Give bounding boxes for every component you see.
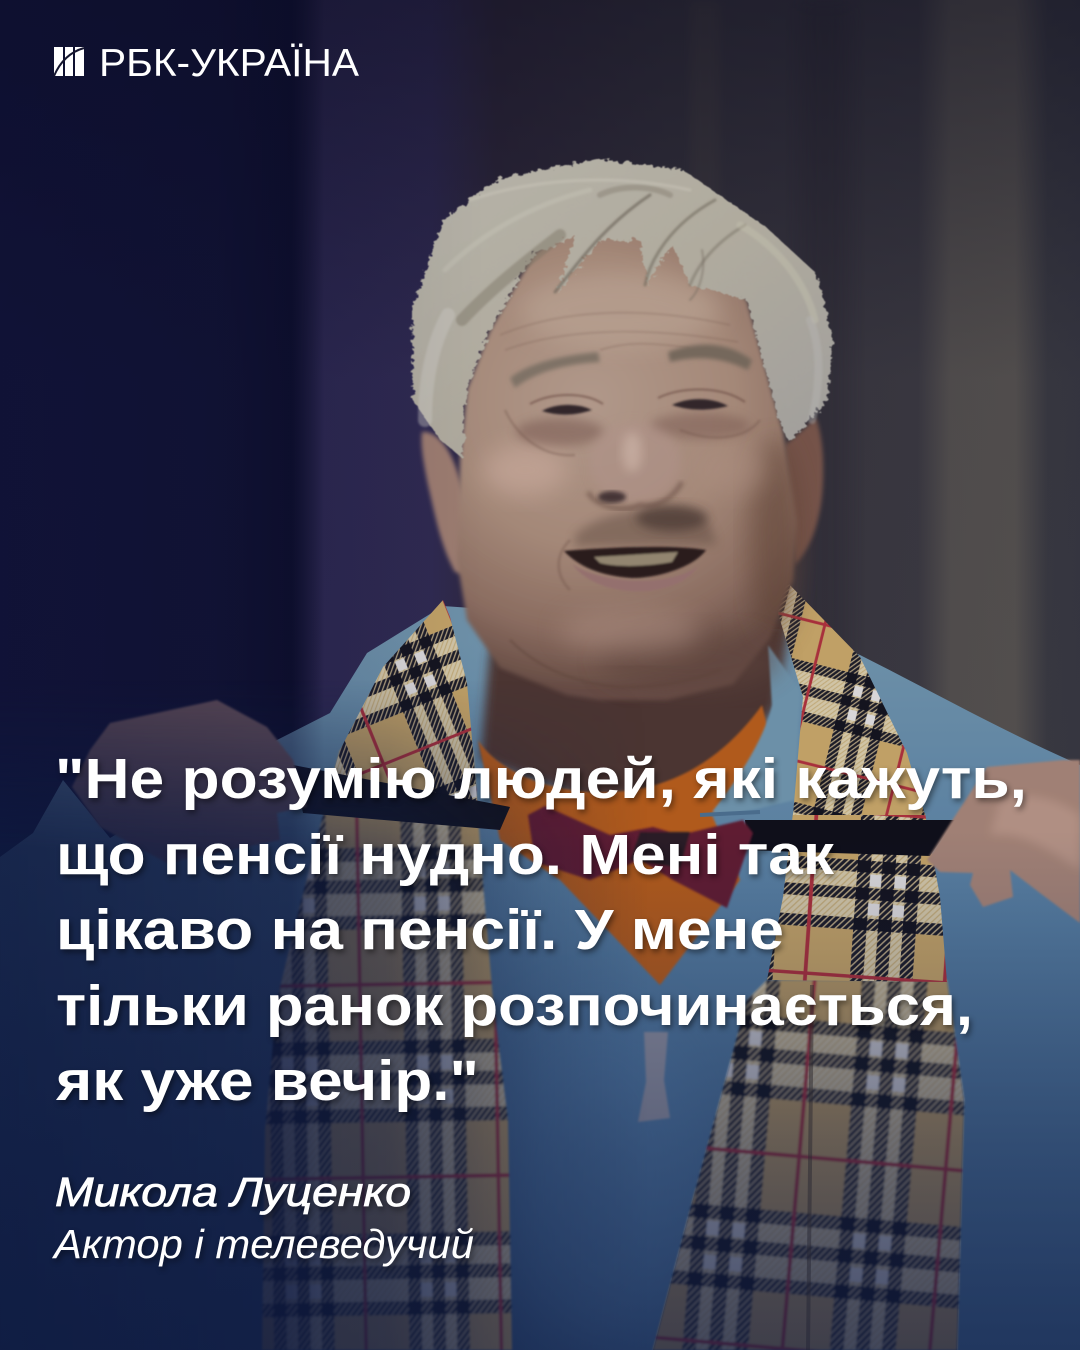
speaker name: Микола Луценко — [55, 1169, 411, 1215]
eyebrows — [510, 345, 752, 388]
logo wordmark: РБК-УКРАЇНА — [99, 42, 359, 85]
quote text: що пенсії нудно. Мені так — [56, 823, 835, 887]
bow tie — [528, 806, 753, 908]
scarf right upper — [778, 580, 925, 815]
scarf right middle — [767, 813, 947, 982]
bow tie strap left — [293, 765, 510, 830]
quote text — [55, 747, 1027, 1113]
scarf left upper — [322, 600, 478, 812]
right hand — [927, 760, 1080, 923]
moustache shadow — [575, 508, 716, 547]
hair strands — [425, 180, 818, 420]
jacket — [0, 606, 1080, 1350]
quote text: "Не розумію людей, які кажуть, — [55, 747, 1027, 811]
logo: РБК-Україна — [54, 42, 359, 85]
right ear — [785, 418, 823, 565]
overlay: navy vignette for text legibility — [0, 633, 1080, 1350]
jacket chest highlight — [490, 1010, 710, 1350]
quote text: цікаво на пенсії. У мене — [56, 898, 784, 962]
left ear — [421, 432, 470, 575]
eyes — [530, 389, 745, 415]
face shading — [483, 272, 801, 690]
mouth — [564, 547, 706, 591]
neck — [480, 620, 790, 800]
left hand — [72, 700, 307, 863]
jacket zip and pull tab — [638, 812, 760, 1122]
speaker role: Актор і телеведучий — [51, 1221, 474, 1267]
scarf right lower dimming — [653, 980, 964, 1350]
quote text: як уже вечір." — [55, 1049, 479, 1113]
bow tie strap right — [745, 820, 955, 856]
nose — [588, 422, 682, 508]
quote text: тільки ранок розпочинається, — [56, 974, 973, 1038]
shirt collar — [478, 705, 772, 985]
logo icon — [54, 47, 84, 76]
hair — [412, 159, 833, 458]
scarf left lower — [262, 750, 512, 1350]
wrinkles — [500, 313, 760, 687]
scarf right lower — [653, 980, 964, 1350]
jacket collar right — [712, 645, 800, 815]
face — [457, 209, 797, 700]
attribution: name and role — [51, 1169, 474, 1267]
